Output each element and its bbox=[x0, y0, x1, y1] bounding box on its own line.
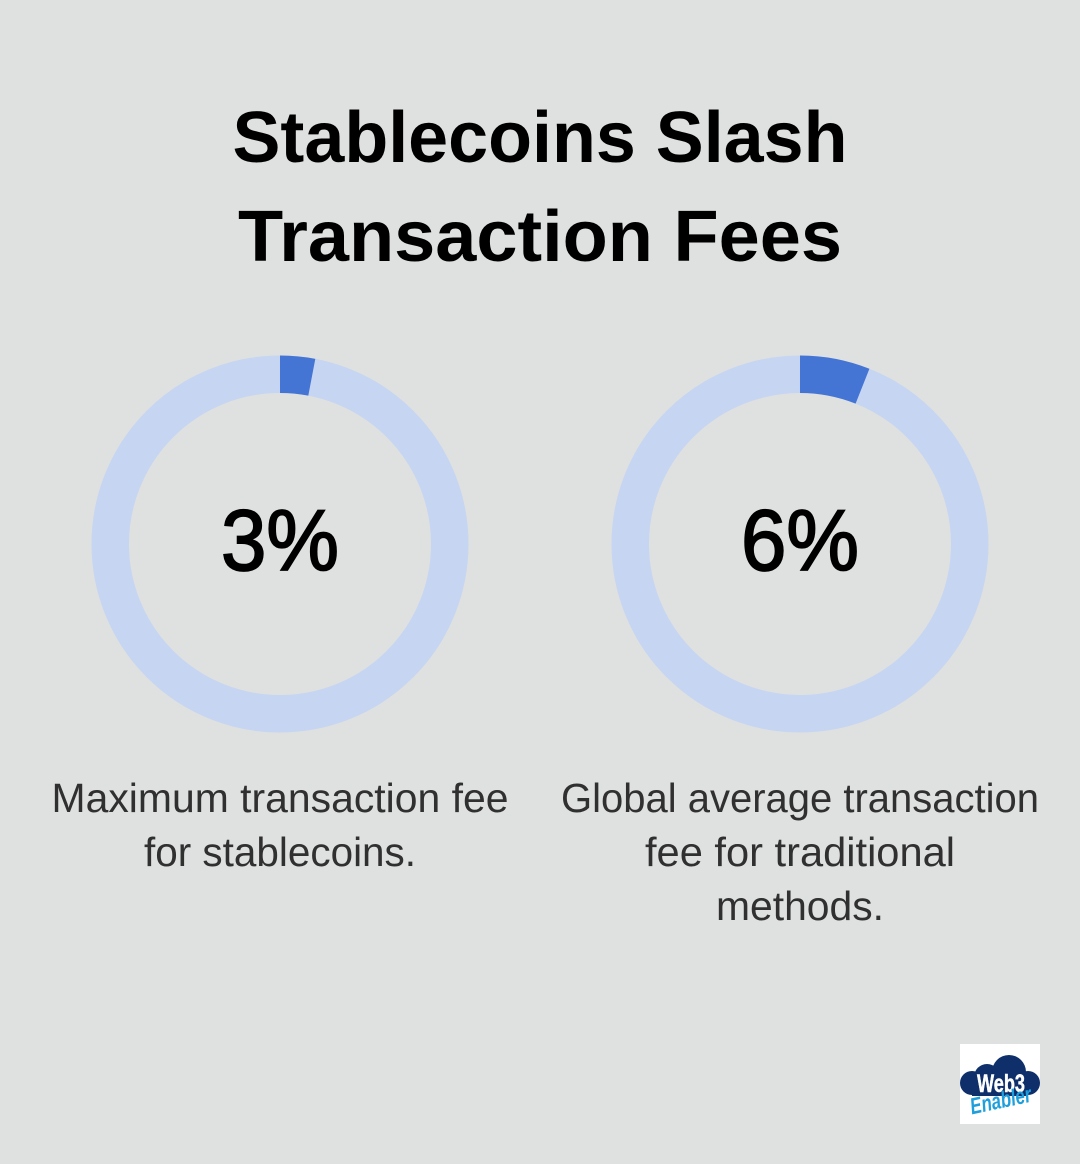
title bbox=[232, 98, 848, 277]
icon: cloud bbox=[960, 1055, 1040, 1096]
wordmark: Web3: Web3 bbox=[977, 1070, 1025, 1098]
panel: traditional fee bbox=[561, 374, 1039, 929]
value: 6%: 6% bbox=[741, 493, 859, 589]
title: Transaction Fees bbox=[238, 197, 842, 277]
wordmark: Enabler: Enabler bbox=[968, 1081, 1034, 1119]
description: stablecoin fee: Maximum transaction fee bbox=[52, 775, 508, 821]
panel: stablecoin fee bbox=[52, 374, 508, 875]
description: stablecoin fee: for stablecoins. bbox=[144, 829, 416, 875]
value: 3%: 3% bbox=[221, 493, 339, 589]
title: Stablecoins Slash bbox=[232, 98, 848, 178]
description: traditional fee: Global average transaction bbox=[561, 775, 1039, 821]
description: traditional fee: fee for traditional bbox=[645, 829, 955, 875]
donut chart: 3% bbox=[110, 374, 450, 714]
description: stablecoin fee bbox=[52, 775, 508, 875]
description: traditional fee: methods. bbox=[716, 883, 884, 929]
logo: Web3 Enabler bbox=[960, 1044, 1040, 1124]
description: traditional fee bbox=[561, 775, 1039, 929]
donut chart: 6% bbox=[630, 374, 970, 714]
